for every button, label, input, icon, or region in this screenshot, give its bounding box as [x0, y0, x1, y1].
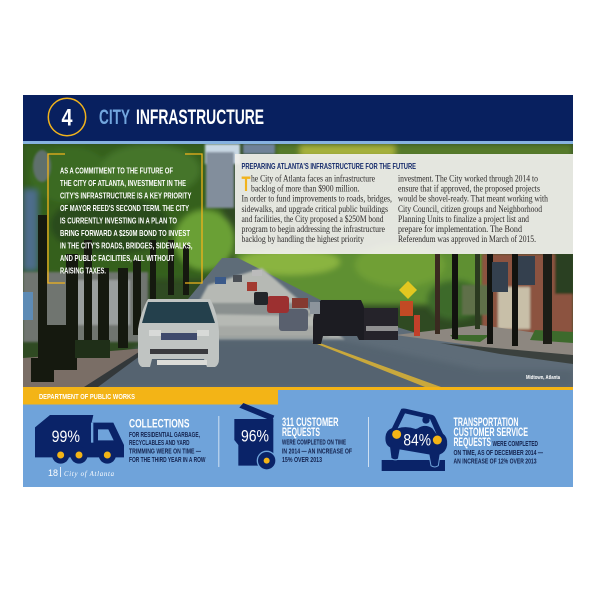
- page number and footer: City of Atlanta: [64, 471, 115, 478]
- left tree trunks and lamps: [31, 215, 189, 382]
- panel heading: PREPARING ATLANTA'S INFRASTRUCTURE FOR THE FUTURE: [242, 161, 416, 171]
- icon: garbage truck 99%: [35, 415, 124, 464]
- collections text: RECYCLABLES AND YARD: [129, 438, 190, 447]
- black SUV: [313, 300, 398, 344]
- callout panel: infrastructure: [235, 154, 573, 254]
- 311 requests text: 15% OVER 2013: [282, 455, 322, 464]
- body column one: and facilities, the City proposed a $250M bond: [242, 214, 384, 224]
- department tab: [23, 387, 278, 404]
- department tab: DEPARTMENT OF PUBLIC WORKS: [39, 392, 135, 401]
- body column one: backlog by handling the highest priority: [242, 234, 364, 244]
- section number badge: 4: [62, 104, 73, 132]
- body column one: he City of Atlanta faces an infrastructure: [251, 174, 375, 184]
- title: CITY: [99, 106, 130, 129]
- icon: recycling bin 96%: [234, 403, 276, 470]
- commitment statement in bracket: CITY'S INFRASTRUCTURE IS A KEY PRIORITY: [60, 190, 192, 200]
- body column two: Referendum was approved in March of 2015.: [398, 234, 536, 244]
- transportation requests text: TRANSPORTATION: [454, 417, 518, 429]
- collections text: COLLECTIONS: [129, 419, 190, 431]
- collections text: TRIMMING WERE ON TIME —: [129, 446, 202, 456]
- header band: [23, 95, 573, 144]
- body column two: [398, 174, 548, 244]
- body column one: In order to fund improvements to roads, bridges,: [242, 194, 392, 204]
- icon: car on pothole 84%: 84%: [403, 431, 431, 450]
- street photograph: [23, 144, 573, 387]
- transportation requests text: ON TIME, AS OF DECEMBER 2014 —: [454, 448, 544, 457]
- body column one: sidewalks, and upgrade critical public buildings: [242, 204, 388, 214]
- silver van: [138, 299, 219, 367]
- commitment statement in bracket: THE CITY OF ATLANTA, INVESTMENT IN THE: [60, 178, 186, 188]
- 311 requests text: [282, 417, 352, 464]
- section number badge: [48, 98, 86, 136]
- road centre line: [312, 342, 441, 387]
- commitment statement in bracket: OF MAYOR REED'S SECOND TERM. THE CITY: [60, 203, 189, 213]
- transportation requests text: [454, 417, 544, 466]
- body column one: [242, 174, 392, 244]
- body column one: program to begin addressing the infrastructure: [242, 224, 385, 234]
- icon: garbage truck 99%: 99%: [52, 427, 80, 446]
- 311 requests text: 311 CUSTOMER: [282, 417, 339, 429]
- commitment statement in bracket: IN THE CITY'S ROADS, BRIDGES, SIDEWALKS,: [60, 240, 192, 250]
- 311 requests text: WERE COMPLETED ON TIME: [282, 438, 346, 446]
- icon: recycling bin 96%: 96%: [241, 427, 269, 446]
- body column two: investment. The City worked through 2014 to: [398, 174, 538, 184]
- commitment statement in bracket: [48, 154, 202, 283]
- commitment statement in bracket: AS A COMMITMENT TO THE FUTURE OF: [60, 166, 173, 176]
- foliage and buildings: [23, 144, 573, 320]
- 311 requests text: REQUESTS: [282, 427, 320, 439]
- title: [99, 106, 264, 129]
- transportation requests text: AN INCREASE OF 12% OVER 2013: [454, 457, 537, 466]
- right poles, signs and banners: [399, 254, 552, 346]
- body column two: Planning Units to finalize a project list and: [398, 214, 529, 224]
- transportation requests text: REQUESTS: [454, 437, 491, 449]
- body column two: prepare for implementation. The Bond: [398, 224, 522, 234]
- drop cap: T: [242, 173, 251, 196]
- commitment statement in bracket: AND PUBLIC FACILITIES, ALL WITHOUT: [60, 253, 175, 263]
- collections text: [129, 419, 206, 464]
- body column two: ensure that if approved, the proposed projects: [398, 184, 540, 194]
- 311 requests text: IN 2014 — AN INCREASE OF: [282, 446, 352, 456]
- body column two: would be shovel-ready. That meant working with: [398, 194, 548, 204]
- commitment statement in bracket: BRING FORWARD A $250M BOND TO INVEST: [60, 228, 191, 238]
- distant cars: [215, 270, 320, 331]
- title: INFRASTRUCTURE: [136, 106, 264, 129]
- right sidewalk and curb: [398, 325, 573, 355]
- collections text: FOR THE THIRD YEAR IN A ROW: [129, 455, 206, 464]
- panel: public works metrics: [23, 387, 573, 487]
- commitment statement in bracket: IS CURRENTLY INVESTING IN A PLAN TO: [60, 216, 177, 226]
- page number and footer: 18: [48, 468, 58, 478]
- left sidewalk: [23, 348, 148, 387]
- page number and footer: [48, 467, 115, 478]
- icon: car on pothole 84%: [382, 408, 448, 471]
- road: [80, 258, 573, 387]
- transportation requests text: CUSTOMER SERVICE: [454, 427, 528, 439]
- transportation requests text: WERE COMPLETED: [492, 439, 538, 448]
- body column one: backlog of more than $900 million.: [251, 184, 360, 194]
- commitment statement in bracket: RAISING TAXES.: [60, 266, 106, 276]
- collections text: FOR RESIDENTIAL GARBAGE,: [129, 430, 200, 439]
- photo caption: Midtown, Atlanta: [526, 375, 560, 381]
- body column two: City Council, citizen groups and Neighborhood: [398, 204, 542, 214]
